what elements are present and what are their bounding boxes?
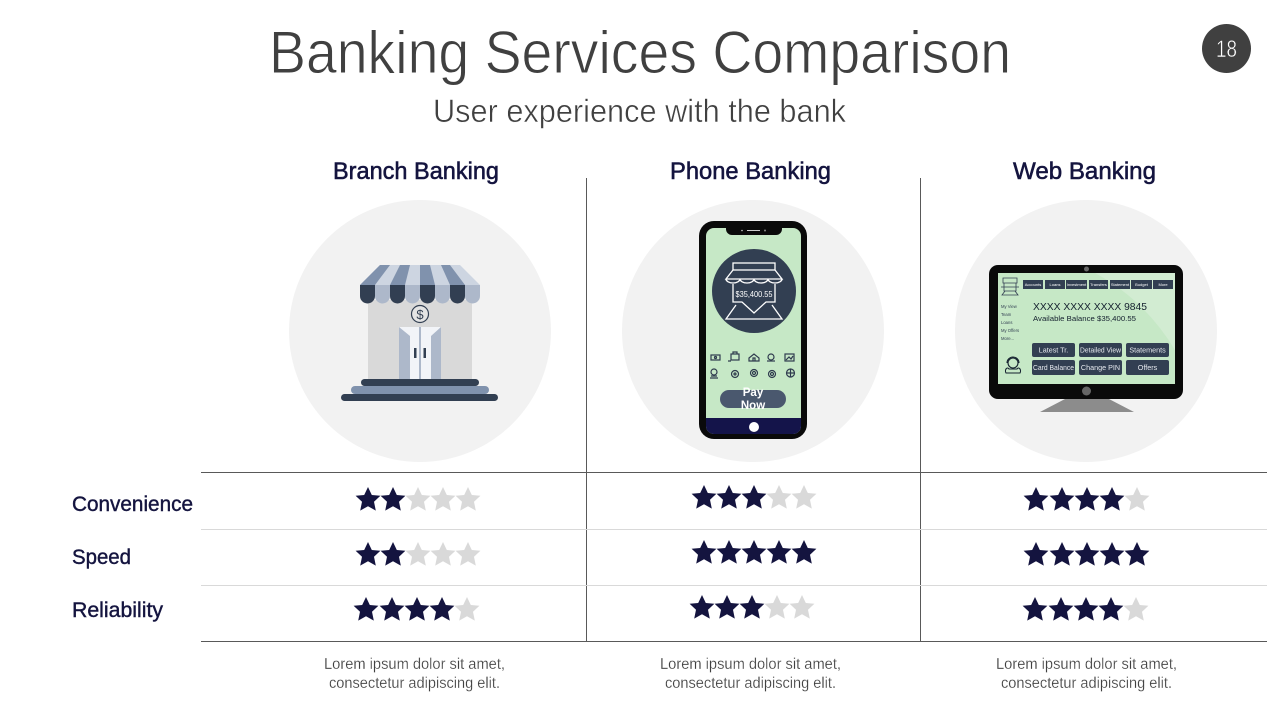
side menu xyxy=(1001,304,1019,341)
side menu: My Offers xyxy=(1001,328,1019,333)
stars: branch reliability xyxy=(354,597,479,621)
icon: bank branch storefront xyxy=(289,200,551,462)
text block: phone note: consectetur adipiscing elit. xyxy=(665,675,836,692)
web nav: Transfers xyxy=(1090,282,1107,287)
stars: branch speed xyxy=(356,542,480,566)
text block: web note: Lorem ipsum dolor sit amet, xyxy=(996,656,1177,673)
text block: branch note xyxy=(324,656,505,692)
pay now button: Pay xyxy=(743,387,764,399)
web buttons: Change PIN xyxy=(1081,363,1120,372)
icon: desktop monitor with web banking xyxy=(955,200,1217,462)
web nav: Accounts xyxy=(1025,282,1041,287)
side menu: Team xyxy=(1001,312,1012,317)
side menu: More... xyxy=(1001,336,1014,341)
stars: phone reliability xyxy=(690,595,814,619)
web nav xyxy=(1001,278,1173,295)
page number badge xyxy=(1202,24,1251,73)
stars: web reliability xyxy=(1023,597,1148,621)
text block: branch note: consectetur adipiscing elit. xyxy=(329,675,500,692)
title: Banking Services Comparison xyxy=(269,19,1011,86)
web nav: Loans xyxy=(1050,282,1060,287)
web buttons xyxy=(1032,343,1169,375)
pay now button xyxy=(720,387,786,412)
stars: web speed xyxy=(1024,542,1149,566)
dollar coin xyxy=(412,306,428,322)
web nav: More xyxy=(1158,282,1168,287)
card number and balance xyxy=(1033,301,1147,323)
stars: phone convenience xyxy=(692,485,816,509)
web nav: Statement xyxy=(1111,282,1130,287)
icon: smartphone with banking app xyxy=(622,200,884,462)
doors xyxy=(399,327,441,379)
app icons xyxy=(710,352,794,378)
subtitle: User experience with the bank xyxy=(433,93,847,129)
row label: Speed: Speed xyxy=(72,546,131,569)
web nav: Budget xyxy=(1135,282,1149,287)
row label: Convenience: Convenience xyxy=(72,493,193,516)
row label: Reliability: Reliability xyxy=(72,599,163,622)
text block: phone note: Lorem ipsum dolor sit amet, xyxy=(660,656,841,673)
web buttons: Statements xyxy=(1129,346,1166,354)
column heading: Phone Banking: Phone Banking xyxy=(670,158,831,185)
card number and balance: Available Balance $35,400.55 xyxy=(1033,314,1136,323)
dollar coin: $ xyxy=(416,307,424,322)
pay now button: Now xyxy=(741,400,765,412)
web buttons: Offers xyxy=(1138,363,1158,372)
web nav: Investment xyxy=(1067,282,1087,287)
text block: web note xyxy=(996,656,1177,692)
text block: phone note xyxy=(660,656,841,692)
app logo circle: $35,400.55 xyxy=(736,289,773,299)
stars: branch convenience xyxy=(356,487,480,511)
column heading: Web Banking: Web Banking xyxy=(1013,158,1156,185)
text block: branch note: Lorem ipsum dolor sit amet, xyxy=(324,656,505,673)
text block: web note: consectetur adipiscing elit. xyxy=(1001,675,1172,692)
card number and balance: XXXX XXXX XXXX 9845 xyxy=(1033,301,1147,313)
side menu: My View xyxy=(1001,304,1018,309)
column heading: Branch Banking: Branch Banking xyxy=(333,158,499,185)
side menu: Loans xyxy=(1001,320,1012,325)
steps xyxy=(341,379,498,401)
web buttons: Latest Tr. xyxy=(1039,346,1068,354)
app logo circle xyxy=(712,249,796,333)
awning xyxy=(360,265,480,304)
web buttons: Card Balance xyxy=(1033,363,1074,372)
support agent icon xyxy=(1005,357,1021,373)
stars: web convenience xyxy=(1024,487,1149,511)
page number badge: 18 xyxy=(1216,36,1237,63)
stars: phone speed xyxy=(692,540,816,564)
web buttons: Detailed View xyxy=(1080,346,1122,354)
